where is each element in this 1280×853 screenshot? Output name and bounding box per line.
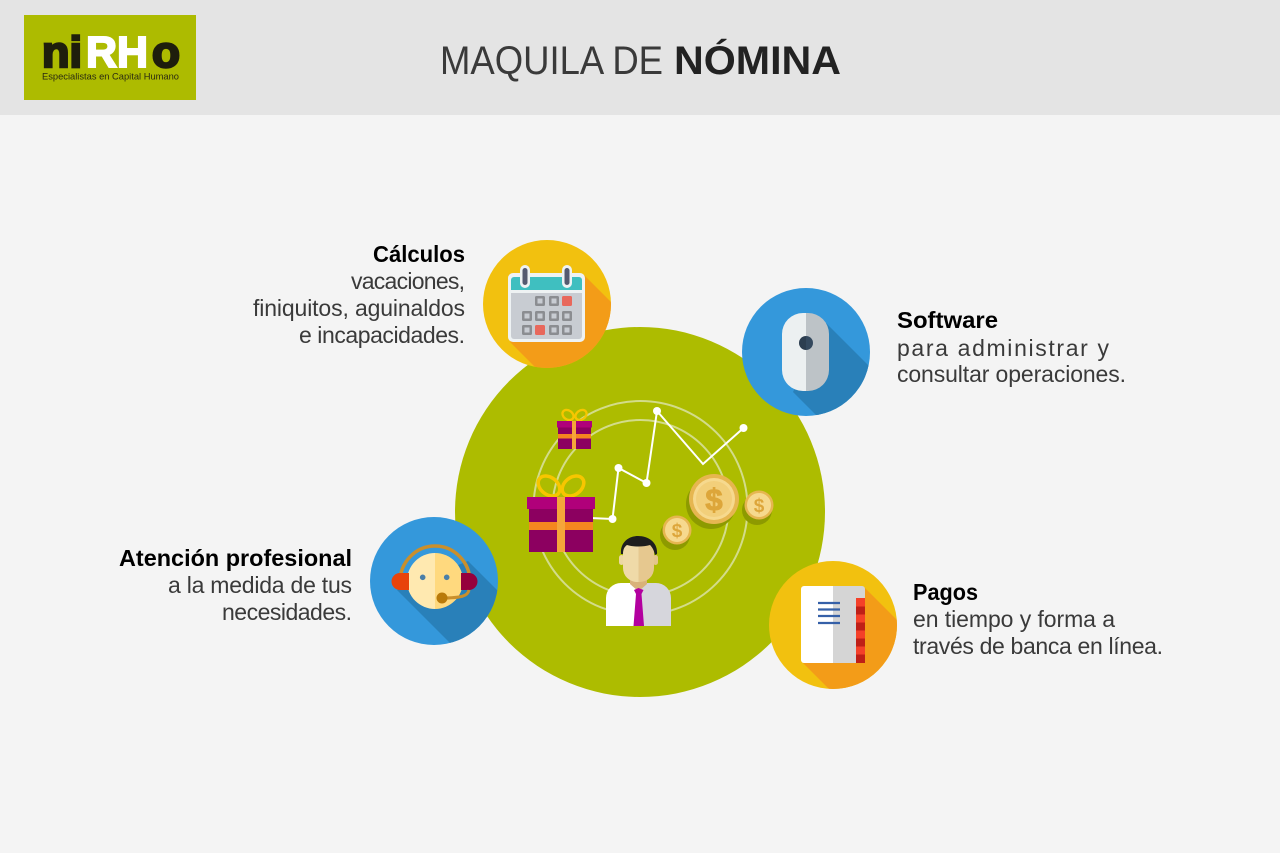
logo: niRHo: Especialistas en Capital Humano	[42, 72, 179, 82]
icon circle: headset agent	[370, 517, 498, 645]
line chart	[590, 407, 748, 523]
concentric rings	[534, 401, 748, 615]
text block: Cálculos	[253, 241, 465, 348]
icon: small gift	[557, 408, 592, 449]
icon: business person	[606, 536, 671, 626]
text block: Software: consultar operaciones.	[897, 361, 1126, 387]
logo: niRHo	[24, 15, 196, 100]
icon circle: calendar	[483, 240, 611, 368]
icon circle: mouse	[742, 288, 870, 416]
text block: Pagos: en tiempo y forma a	[913, 606, 1115, 632]
central green circle	[455, 327, 825, 697]
text block: Cálculos: Cálculos	[373, 241, 465, 267]
icon: right coin: $	[754, 496, 765, 517]
icon: large coin	[686, 474, 739, 529]
logo: niRHo: o	[152, 28, 180, 77]
icon: large coin: $	[705, 482, 723, 517]
icon: left coin: $	[672, 521, 683, 542]
text block: Pagos: Pagos	[913, 579, 978, 605]
text block: Cálculos: vacaciones,	[351, 268, 465, 294]
text block: Atención profesional: Atención profesional	[119, 545, 352, 571]
text block: Software: Software	[897, 307, 998, 333]
text block: Pagos: través de banca en línea.	[913, 633, 1163, 659]
title: MAQUILA DE	[440, 39, 663, 83]
icon: large gift	[527, 472, 595, 552]
text block: Software: para administrar y	[897, 335, 1110, 361]
icon circle: notebook	[769, 561, 897, 689]
icon: left coin	[660, 516, 692, 550]
title	[440, 37, 841, 83]
logo: niRHo: RH	[86, 28, 148, 77]
text block: Cálculos: finiquitos, aguinaldos	[253, 295, 465, 321]
title: NÓMINA	[674, 37, 841, 83]
text block: Cálculos: e incapacidades.	[299, 322, 465, 348]
text block: Atención profesional	[119, 545, 352, 625]
text block: Pagos	[913, 579, 1163, 659]
text block: Atención profesional: a la medida de tus	[168, 572, 352, 598]
icon: right coin	[742, 490, 774, 525]
header band	[0, 0, 1280, 115]
text block: Atención profesional: necesidades.	[222, 599, 352, 625]
text block: Software	[897, 307, 1126, 387]
logo: niRHo: ni	[42, 28, 82, 77]
